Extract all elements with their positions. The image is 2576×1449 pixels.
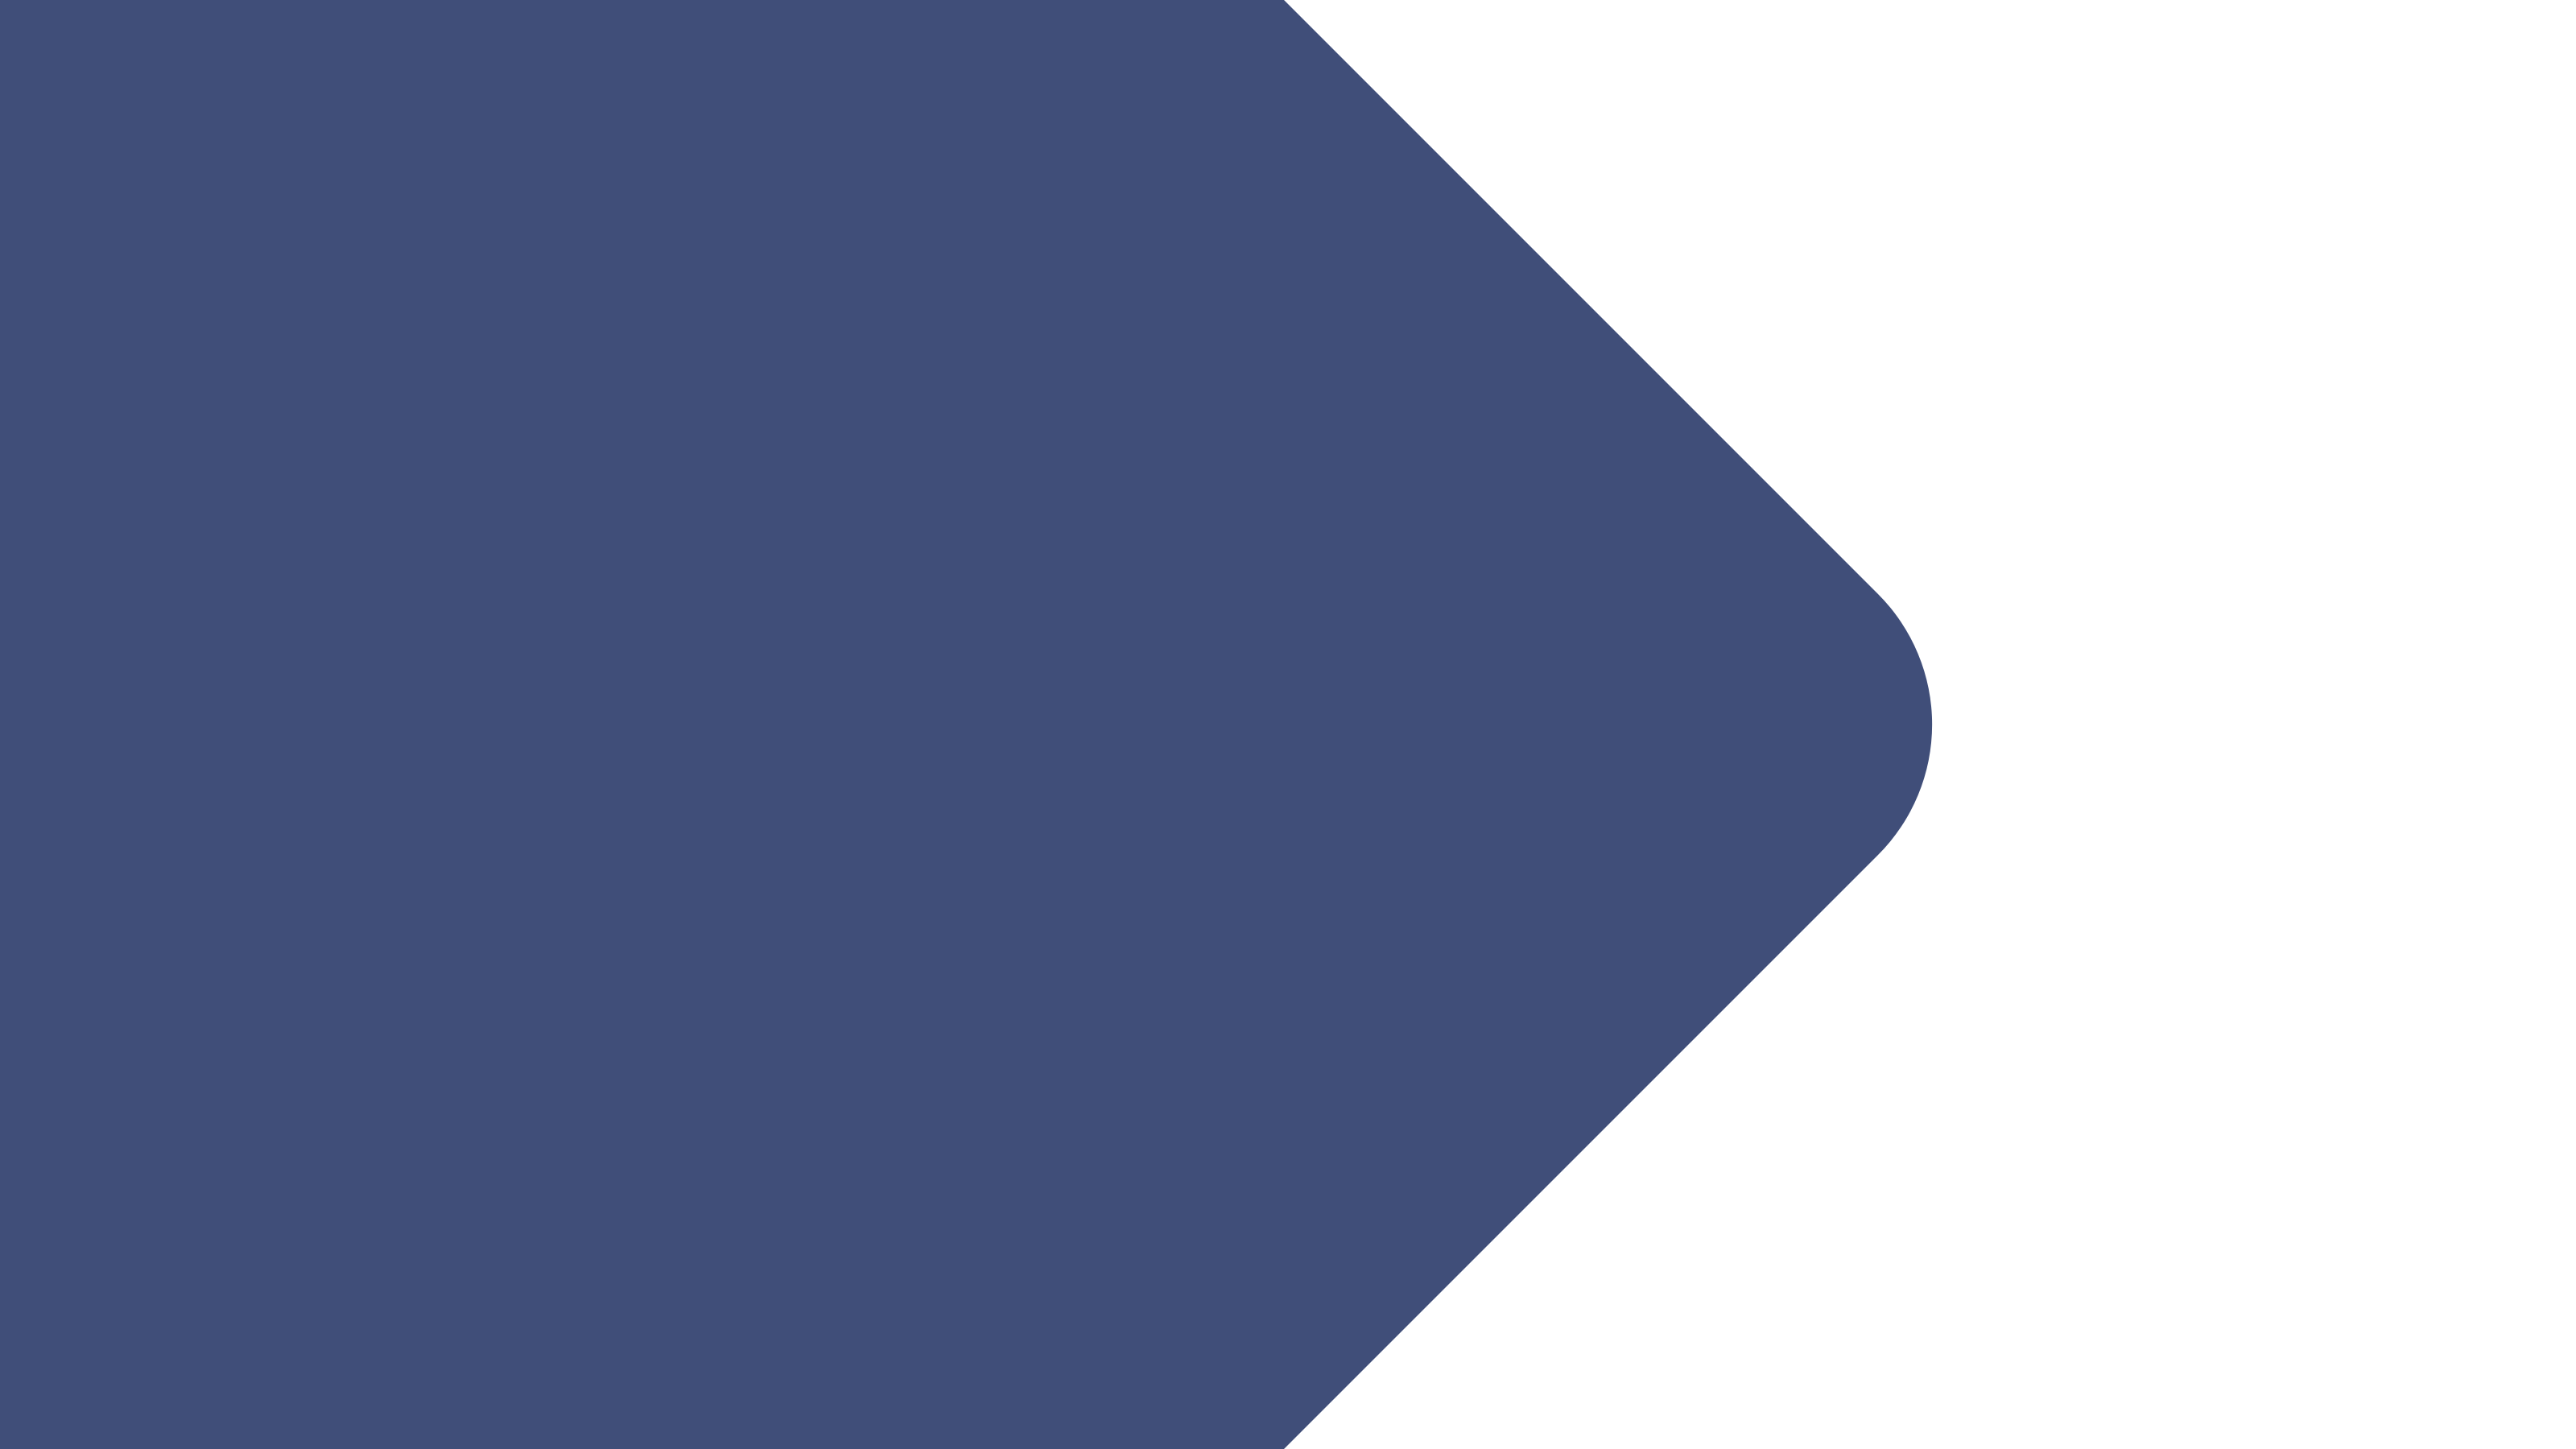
panel: navy rounded arrow shape: [0, 0, 1932, 1449]
